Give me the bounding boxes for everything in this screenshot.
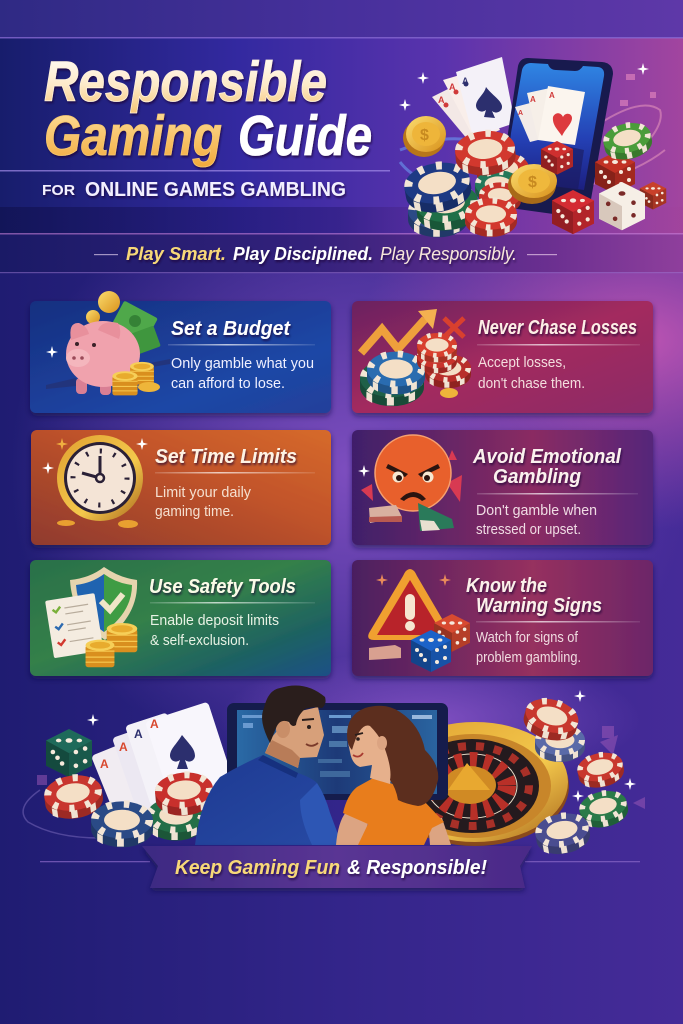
description (478, 354, 585, 392)
icon: smartphone: A (530, 95, 536, 104)
icon: playing cards: A (438, 95, 445, 105)
title (44, 50, 372, 168)
heading: Avoid Emotional (472, 446, 621, 468)
icon: gold coin front: $ (528, 174, 537, 191)
description: & self-exclusion. (150, 632, 249, 649)
subtitle: ONLINE GAMES GAMBLING (85, 179, 346, 201)
header band (0, 37, 683, 234)
icon: playing cards: A (134, 727, 143, 741)
icon: playing cards (91, 702, 234, 823)
description (150, 612, 279, 649)
heading: Set a Budget (171, 318, 291, 340)
icon: smartphone (500, 58, 613, 217)
tagline (126, 244, 517, 264)
icon: green die (46, 729, 92, 777)
title: Guide (238, 104, 372, 168)
header illustration: phone, cards, chips, dice (399, 57, 666, 237)
poker chips back (401, 128, 529, 237)
description: don't chase them. (478, 375, 585, 392)
description: Enable deposit limits (150, 612, 279, 629)
woman (336, 706, 451, 845)
subtitle: FOR (42, 182, 75, 199)
card: Set a Budget (30, 291, 331, 413)
icon: green chip (601, 119, 655, 164)
card: Set Time Limits (31, 430, 331, 545)
icon: warning triangle, dice (368, 569, 470, 672)
banner text: & Responsible! (347, 857, 487, 879)
title: Gaming (44, 104, 222, 168)
heading: Know the (466, 575, 547, 597)
icon: arrow, X and chips (360, 309, 471, 406)
monitor (227, 703, 448, 800)
heading: Use Safety Tools (149, 576, 296, 598)
banner (142, 846, 532, 888)
icon: roulette wheel (381, 722, 569, 846)
chips left (42, 770, 215, 847)
description: problem gambling. (476, 649, 581, 666)
description (171, 355, 314, 392)
description: stressed or upset. (476, 521, 581, 538)
description: can afford to lose. (171, 375, 285, 392)
card: Avoid Emotional Gambling (352, 430, 653, 545)
icon: angry face (358, 435, 462, 531)
tagline band (0, 233, 683, 273)
heading: Never Chase Losses (478, 317, 637, 339)
heading: Gambling (493, 466, 581, 488)
heading: Set Time Limits (155, 446, 297, 468)
bottom scene (23, 685, 645, 888)
description: Accept losses, (478, 354, 566, 371)
tagline: Play Disciplined. (233, 244, 373, 264)
description: Watch for signs of (476, 629, 579, 646)
icon: playing cards: A (462, 76, 469, 86)
man (195, 685, 342, 845)
heading (466, 575, 602, 617)
dice group (541, 141, 666, 234)
card: Use Safety Tools (30, 560, 331, 676)
banner text: Keep Gaming Fun (175, 857, 340, 879)
description (155, 484, 251, 520)
title: Responsible (44, 50, 327, 114)
banner text (175, 857, 487, 879)
icon: gold coin front (508, 164, 557, 204)
icon: shield, checklist, coins (45, 567, 137, 667)
description: Don't gamble when (476, 502, 597, 519)
tagline: Play Smart. (126, 244, 226, 264)
description: Limit your daily (155, 484, 251, 501)
chips right (520, 693, 631, 858)
heading: Warning Signs (476, 595, 602, 617)
icon: gold coin left (403, 116, 446, 157)
icon: smartphone: A (549, 91, 555, 100)
description (476, 629, 581, 666)
icon: playing cards: A (150, 717, 159, 731)
icon: playing cards: A (100, 757, 109, 771)
icon: gold coin left: $ (420, 127, 429, 144)
tagline: Play Responsibly. (380, 244, 517, 264)
icon: clock (42, 435, 148, 528)
description (476, 502, 597, 538)
heading (472, 446, 621, 488)
icon: playing cards (432, 57, 515, 140)
description: Only gamble what you (171, 355, 314, 372)
icon: playing cards: A (119, 740, 128, 754)
description: gaming time. (155, 503, 234, 520)
icon: playing cards: A (449, 82, 456, 92)
card: Never Chase Losses (352, 301, 653, 413)
icon: piggy bank (46, 291, 170, 395)
icon: smartphone: A (518, 110, 523, 117)
card: Know the Warning Signs (352, 560, 653, 676)
